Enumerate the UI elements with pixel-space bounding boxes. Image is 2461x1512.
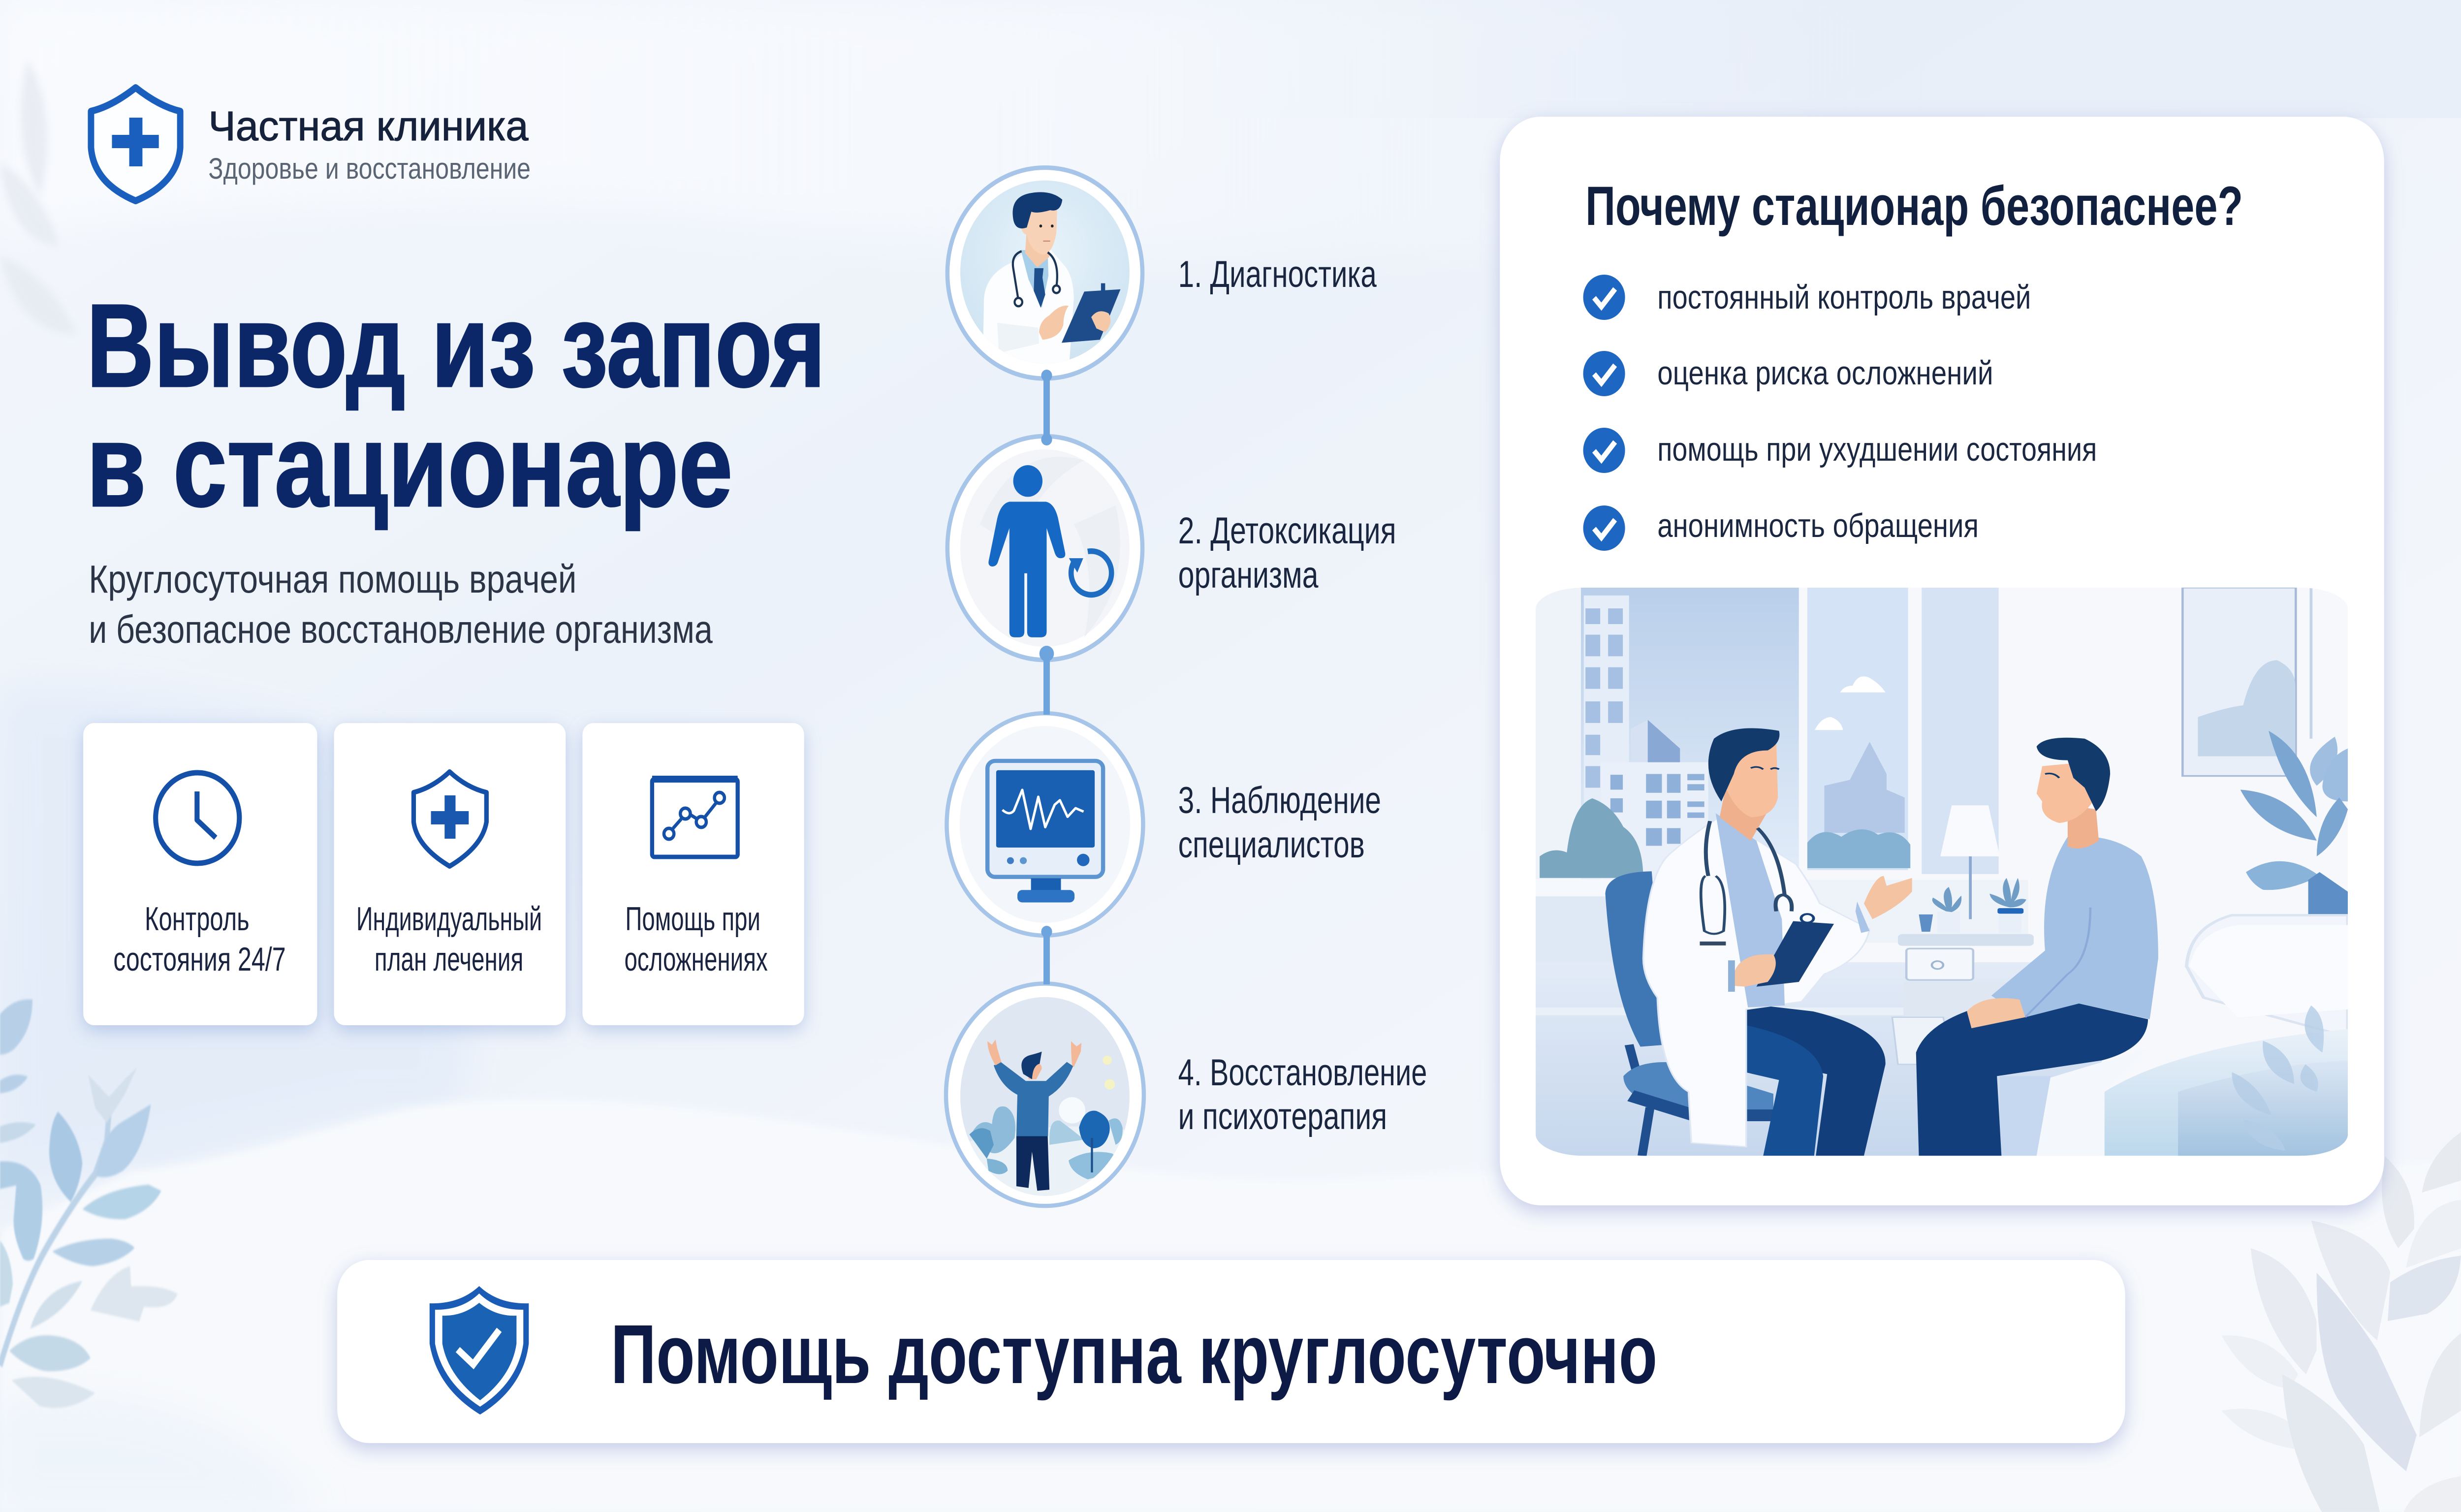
bed [2000, 915, 2348, 1156]
list item 1 [1583, 275, 2031, 320]
list item 3 [1583, 428, 2097, 473]
icon: clock [156, 773, 239, 863]
icon: shield with check [430, 1286, 529, 1415]
card label: Контроль [145, 900, 250, 938]
list item 2: оценка риска осложнений [1657, 354, 1993, 392]
timeline: treatment steps [946, 168, 1427, 1206]
clinic name: Частная клиника [208, 103, 528, 150]
title [87, 280, 825, 531]
title: Вывод из запоя [87, 280, 825, 411]
card: control [83, 723, 317, 1025]
step 3 icon: monitor [947, 713, 1143, 936]
patient [1916, 738, 2158, 1156]
lamp [1940, 805, 2000, 919]
card label: план лечения [375, 941, 523, 978]
card label: осложнениях [624, 941, 768, 978]
step 4 icon: recovery [946, 983, 1144, 1206]
icon: chart [652, 779, 738, 857]
list item 2 [1583, 351, 1993, 396]
list item 4: анонимность обращения [1657, 507, 1979, 544]
list item 1: постоянный контроль врачей [1657, 279, 2031, 316]
list item 4 [1583, 505, 1979, 551]
checklist [1583, 275, 2097, 551]
step 2 icon: body with refresh arrow [947, 436, 1142, 660]
step 2 label [1178, 509, 1396, 596]
plant right [2240, 731, 2348, 917]
icon: shield with cross [413, 772, 486, 866]
step 2 label: организма [1178, 554, 1319, 596]
step 1 icon: doctor [947, 168, 1142, 378]
card label [113, 900, 286, 978]
subtitle [89, 557, 713, 652]
nightstand [1892, 878, 2034, 1064]
step 4 label: 4. Восстановление [1178, 1051, 1427, 1094]
card label: Помощь при [625, 900, 760, 938]
card label [356, 900, 542, 978]
subtitle: Круглосуточная помощь врачей [89, 557, 576, 601]
step 2 label: 2. Детоксикация [1178, 509, 1396, 552]
doctor [1643, 728, 1912, 1156]
list item 3: помощь при ухудшении состояния [1657, 431, 2097, 468]
card label: Индивидуальный [356, 900, 542, 938]
panel: feature cards [83, 723, 804, 1025]
icon: shield with cross [91, 88, 180, 201]
card: plan [334, 723, 566, 1025]
decorative leaves bottom left [0, 999, 178, 1408]
step 4 label: и психотерапия [1178, 1095, 1387, 1137]
subtitle: и безопасное восстановление организма [89, 607, 713, 652]
step 4 label [1178, 1051, 1427, 1137]
card label [624, 900, 768, 978]
decorative leaves bottom right [2222, 1132, 2461, 1512]
connector lines [1040, 370, 1054, 984]
decorative leaves top left [0, 59, 77, 335]
chair [1605, 871, 1773, 1156]
callout text: Помощь доступна круглосуточно [611, 1307, 1657, 1401]
step 3 label: специалистов [1178, 823, 1365, 866]
card: complications [582, 723, 804, 1025]
logo [91, 88, 531, 201]
step 1 label: 1. Диагностика [1178, 253, 1377, 295]
clinic tagline: Здоровье и восстановление [208, 153, 531, 185]
panel heading: Почему стационар безопаснее? [1585, 175, 2243, 237]
title: в стационаре [87, 399, 733, 531]
step 3 label [1178, 779, 1381, 866]
card label: состояния 24/7 [113, 941, 286, 978]
illustration: doctor consulting patient [1536, 588, 2348, 1156]
callout: help available around the clock [337, 1260, 2125, 1443]
step 3 label: 3. Наблюдение [1178, 779, 1381, 821]
panel: why inpatient is safer [1500, 117, 2384, 1205]
